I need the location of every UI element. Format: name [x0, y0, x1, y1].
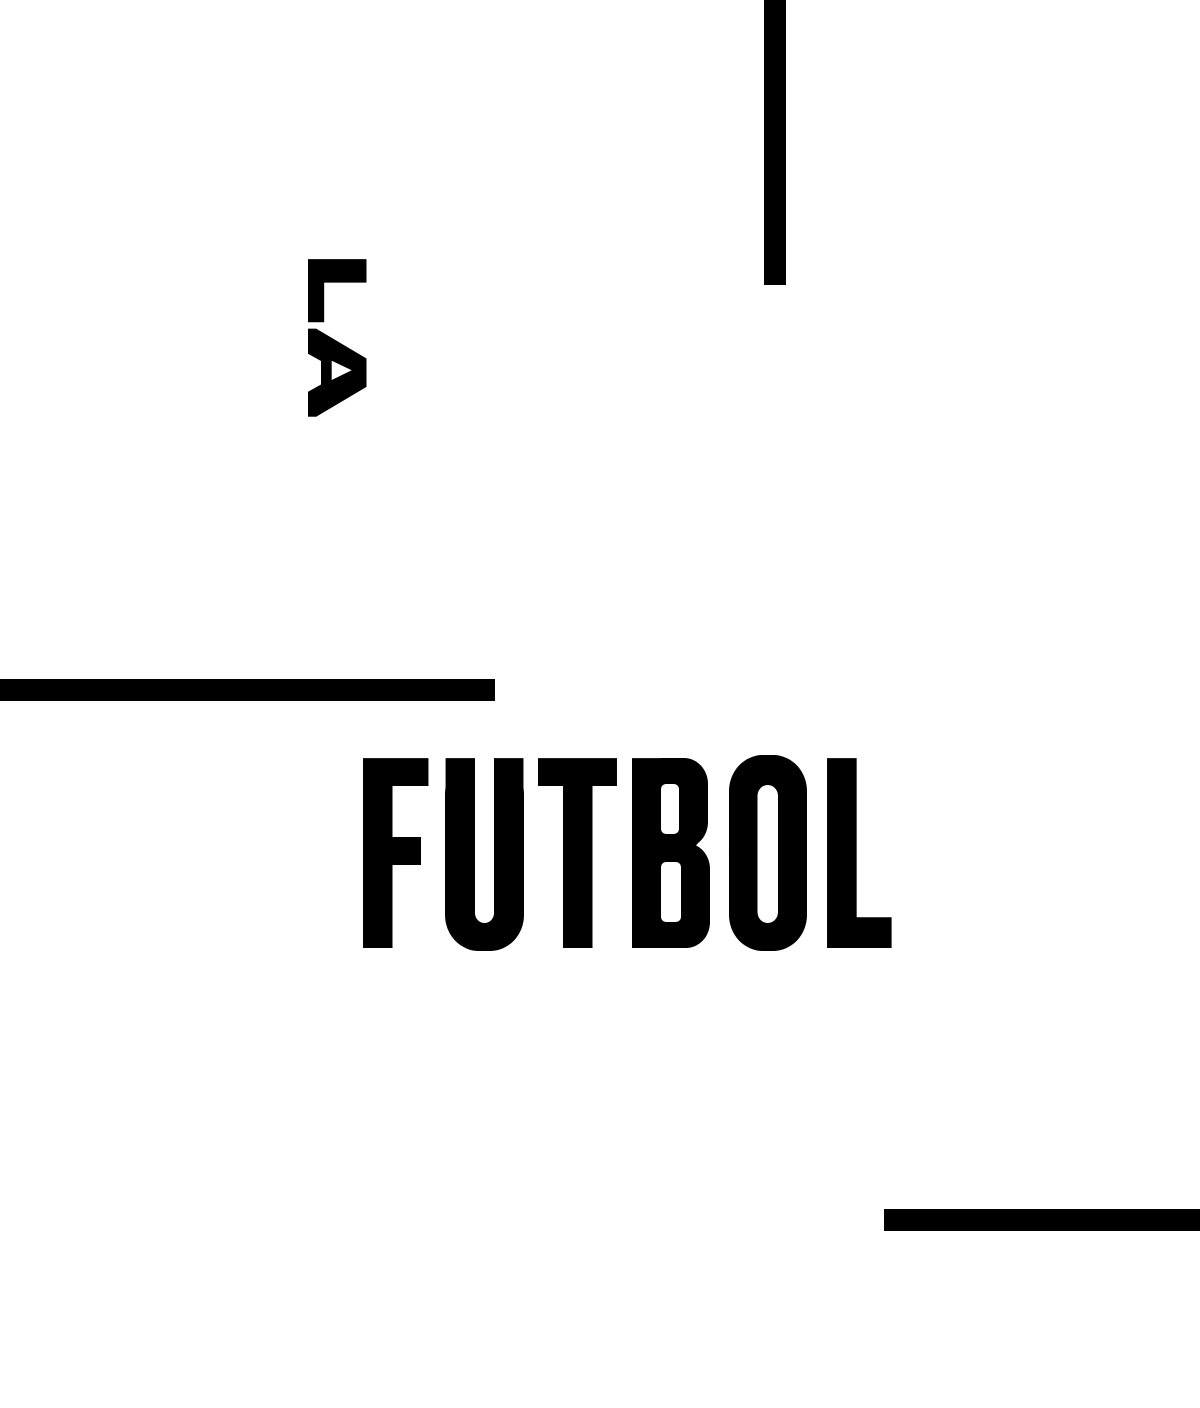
horizontal bar bottom right — [884, 1209, 1200, 1231]
rotated heading: LA — [296, 256, 378, 416]
main title: FUTBOL: U — [447, 699, 522, 1008]
main title: FUTBOL — [364, 698, 887, 1008]
main title: FUTBOL: L — [829, 698, 887, 1007]
main title: FUTBOL: O — [733, 699, 803, 1007]
rotated heading: LA: A — [296, 330, 378, 416]
vertical bar top — [764, 0, 786, 285]
main title: FUTBOL: T — [545, 700, 610, 1007]
main title: FUTBOL: B — [633, 700, 707, 1008]
main title: FUTBOL: F — [364, 699, 424, 1007]
horizontal bar left — [0, 679, 495, 701]
rotated heading: LA: L — [296, 256, 378, 322]
